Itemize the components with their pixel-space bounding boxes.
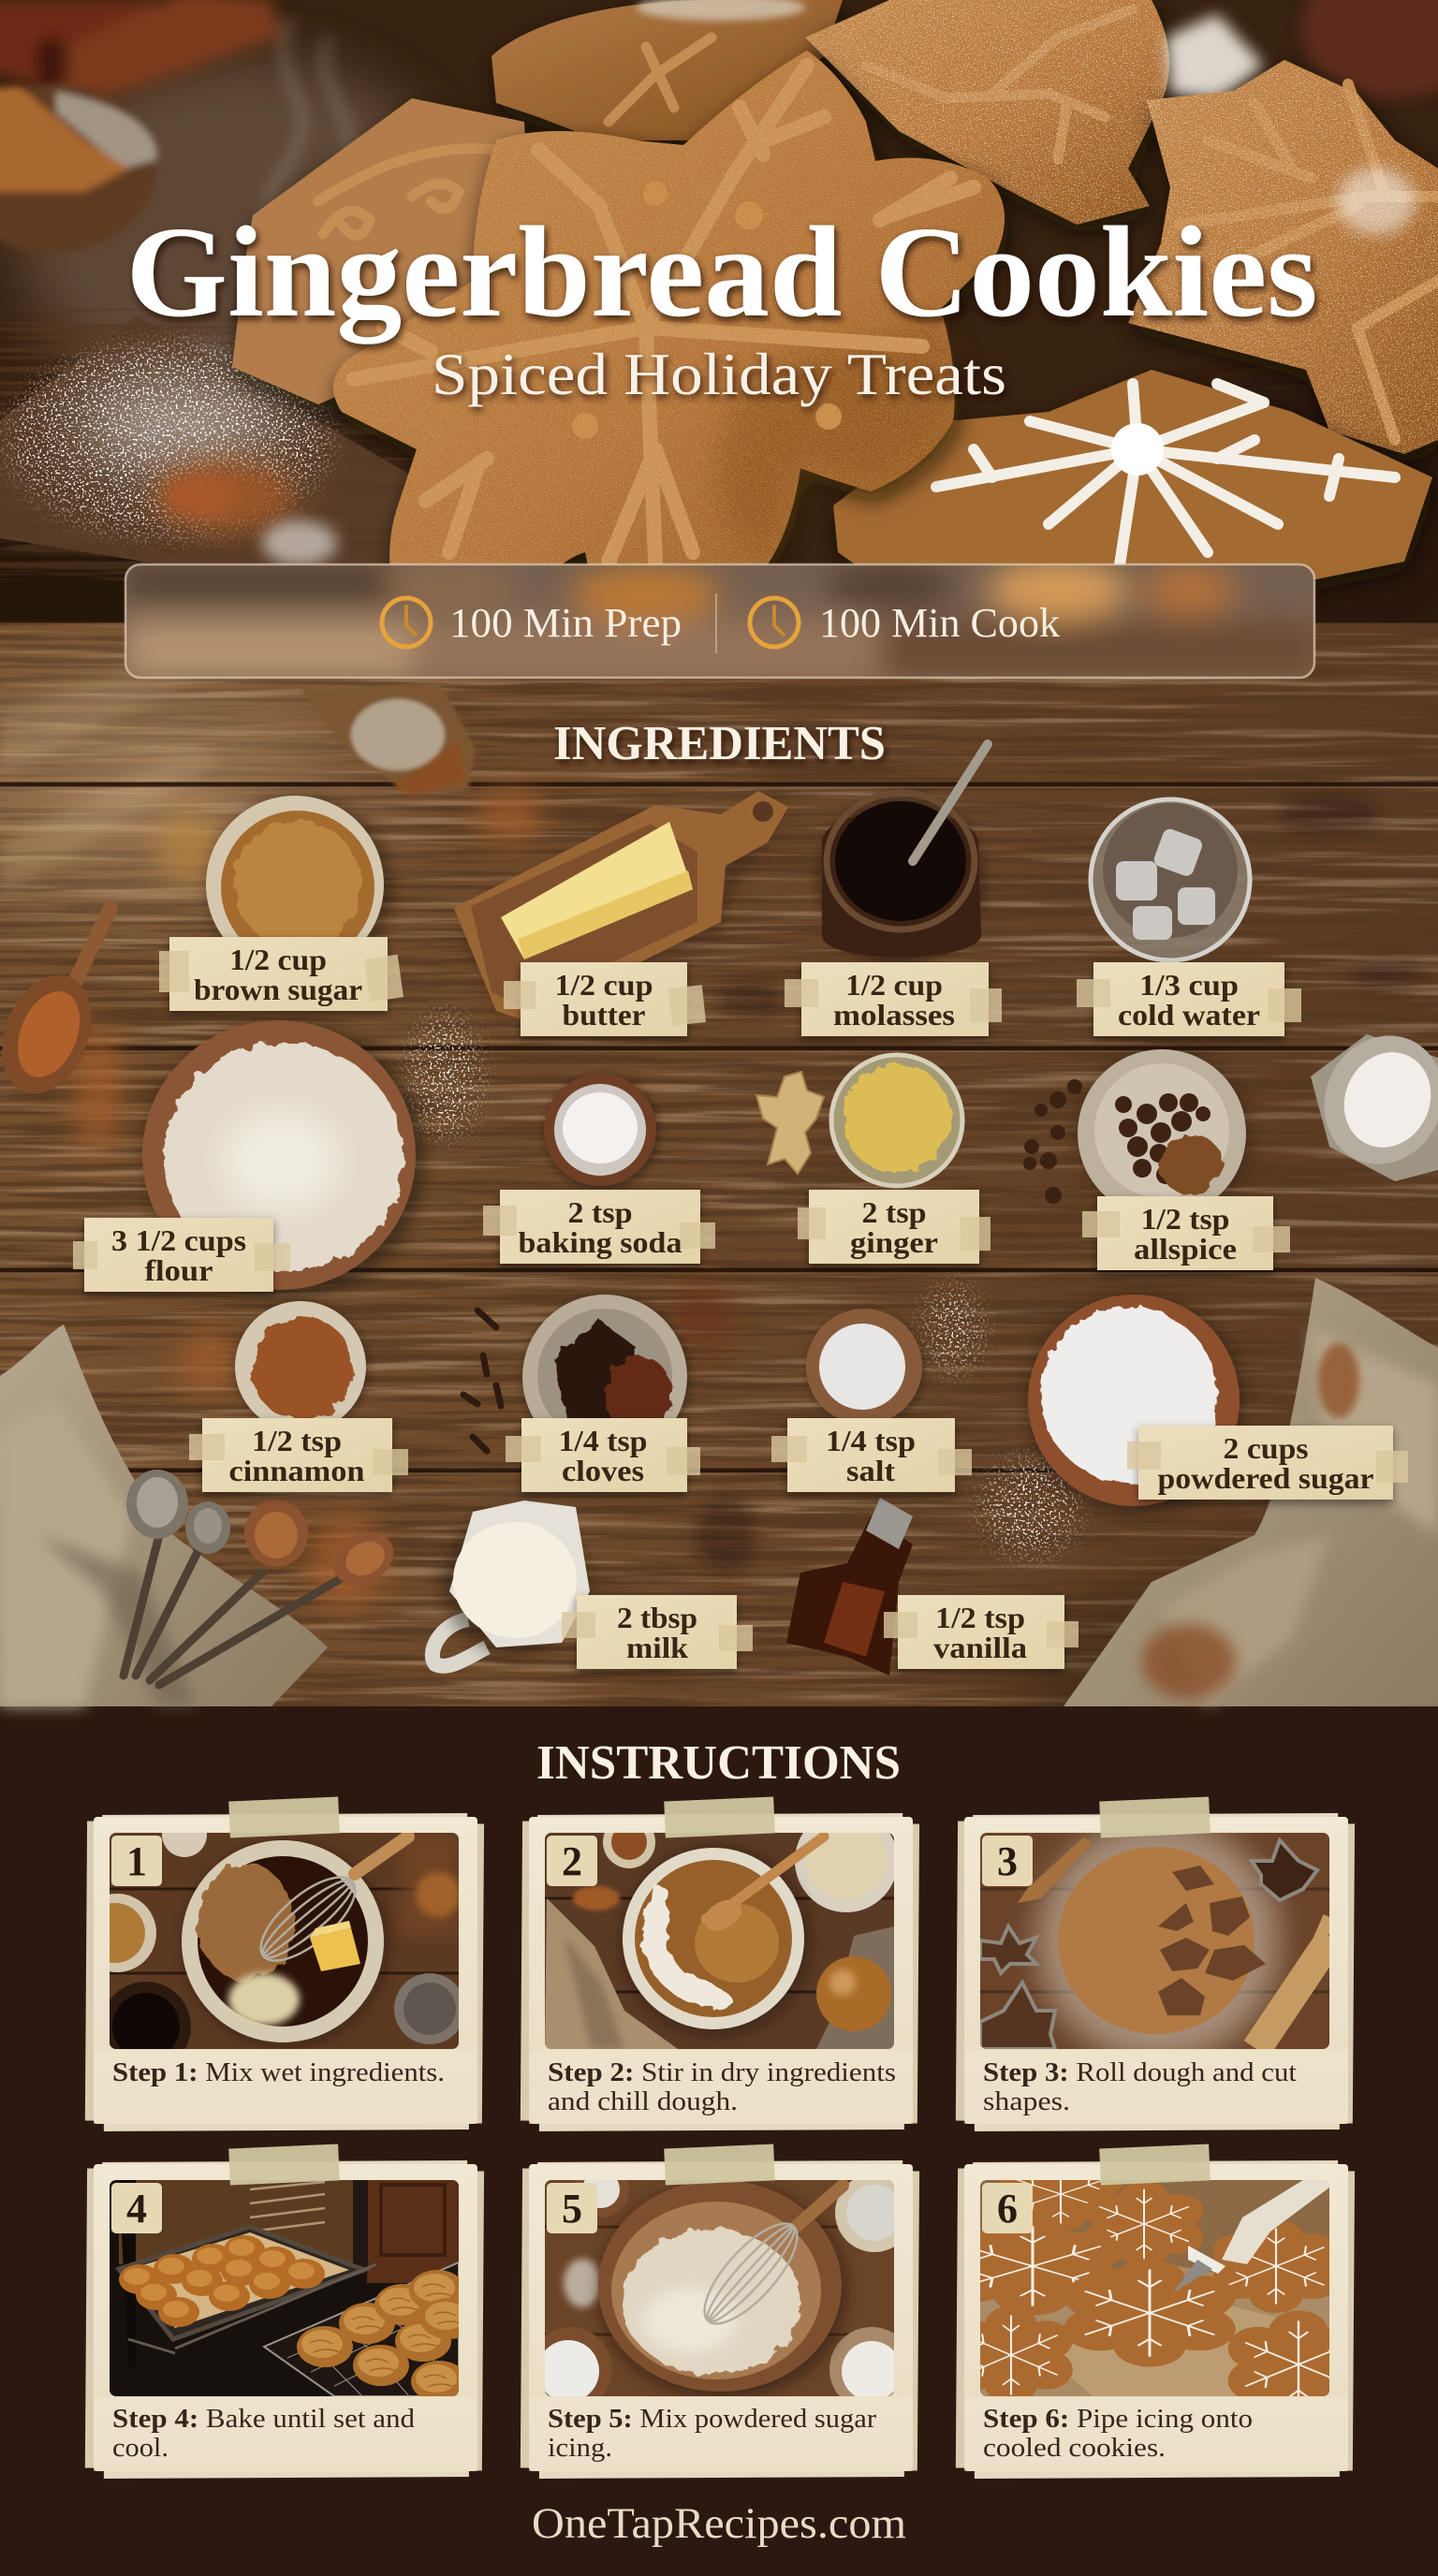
step 2 text <box>548 2057 896 2116</box>
label: brown sugar <box>159 937 404 1011</box>
image: piping icing <box>943 2157 1369 2419</box>
illustration: grated ginger jar <box>829 1053 964 1188</box>
label: milk <box>562 1595 753 1669</box>
label: ginger: 2 tsp <box>861 1195 927 1229</box>
label: cold water <box>1077 962 1301 1036</box>
step 4 text: cool. <box>112 2433 169 2463</box>
number badge 6 <box>982 2183 1033 2233</box>
illustration: scattered allspice berries <box>1023 1079 1082 1204</box>
step 6 text <box>983 2404 1253 2463</box>
illustration: measuring spoons <box>124 1470 403 1685</box>
label: molasses: molasses <box>833 998 955 1032</box>
label: ginger <box>798 1190 990 1264</box>
label: cold water: 1/3 cup <box>1139 968 1239 1002</box>
time bar <box>125 560 1320 678</box>
illustration: vanilla bottle <box>786 1498 913 1676</box>
illustration: brown sugar bowl <box>206 796 393 983</box>
card: step 4 <box>85 2144 484 2479</box>
illustration: baking soda bowl <box>544 1074 660 1191</box>
illustration: right linen towel <box>1064 1278 1438 1706</box>
section heading: ingredients: INGREDIENTS <box>553 717 886 770</box>
cinnamon bowl <box>0 84 157 253</box>
illustration: ginger root <box>756 1072 824 1174</box>
step 4 text: Step 4: Bake until set and <box>112 2404 416 2434</box>
number badge 5: 5 <box>562 2186 582 2232</box>
wood background: ingredients section <box>0 608 1438 1788</box>
wooden board <box>0 315 408 564</box>
image: mixing icing <box>528 2161 914 2411</box>
label: vanilla: vanilla <box>933 1631 1027 1664</box>
illustration: milk jug <box>433 1500 590 1666</box>
step 2 text: Step 2: Stir in dry ingredients <box>548 2057 896 2087</box>
label: flour <box>73 1218 290 1292</box>
label: brown sugar: brown sugar <box>194 973 362 1006</box>
cook time: 100 Min Cook <box>819 600 1060 646</box>
sugar and spice on board <box>80 379 276 473</box>
label: allspice: 1/2 tsp <box>1140 1202 1230 1236</box>
number badge 6: 6 <box>997 2186 1018 2232</box>
card: step 6 <box>943 2144 1369 2479</box>
image: baking in oven <box>110 2180 477 2402</box>
step 5 text: Step 5: Mix powdered sugar <box>548 2404 876 2434</box>
step 3 text: Step 3: Roll dough and cut <box>983 2057 1297 2087</box>
label: cinnamon: cinnamon <box>228 1454 365 1487</box>
label: cold water: cold water <box>1118 998 1260 1032</box>
label: brown sugar: 1/2 cup <box>229 943 327 976</box>
number badge 2 <box>547 1836 597 1886</box>
illustration: sugar jar <box>1303 1016 1438 1184</box>
label: powdered sugar <box>1127 1426 1408 1500</box>
image: stir dry ingredients <box>545 1809 898 2049</box>
label: baking soda: baking soda <box>519 1225 682 1259</box>
label: butter: butter <box>562 998 646 1032</box>
label: baking soda: 2 tsp <box>567 1195 633 1229</box>
label: milk: 2 tbsp <box>617 1601 697 1634</box>
label: cinnamon: 1/2 tsp <box>252 1424 342 1457</box>
number badge 5 <box>547 2183 597 2233</box>
icon: burlap scoop <box>300 683 476 796</box>
illustration: powdered sugar bowl <box>1026 1295 1245 1514</box>
illustration: wooden spoon with spice <box>0 908 110 1107</box>
prep time: 100 Min Prep <box>449 600 682 646</box>
illustration: flour bowl <box>142 1020 426 1299</box>
right snowflake cookie <box>1128 60 1438 454</box>
title: Gingerbread Cookies <box>125 200 1318 344</box>
footer: website: OneTapRecipes.com <box>532 2499 906 2548</box>
step 5 text <box>548 2404 876 2463</box>
icon: clock prep <box>382 598 431 647</box>
number badge 4: 4 <box>126 2186 147 2232</box>
subtitle: Spiced Holiday Treats <box>432 341 1006 407</box>
label: baking soda <box>483 1190 715 1264</box>
label: flour: 3 1/2 cups <box>111 1223 246 1257</box>
hero photo: gingerbread cookies <box>0 0 1438 601</box>
illustration: allspice bowl <box>1078 1049 1250 1222</box>
label: salt: 1/4 tsp <box>826 1424 916 1457</box>
label: powdered sugar: powdered sugar <box>1157 1461 1374 1495</box>
step 3 text: shapes. <box>983 2086 1070 2116</box>
illustration: scattered cloves <box>463 1310 501 1451</box>
label: cloves: 1/4 tsp <box>558 1424 648 1457</box>
step 1 text: Step 1: Mix wet ingredients. <box>112 2057 445 2087</box>
label: butter <box>504 962 706 1036</box>
illustration: cloves bowl <box>522 1295 691 1463</box>
step 6 text: Step 6: Pipe icing onto <box>983 2404 1253 2434</box>
spice dust patches <box>75 790 728 1610</box>
illustration: molasses jar <box>820 744 988 962</box>
back cookies <box>492 0 843 140</box>
steam <box>267 19 349 262</box>
label: salt: salt <box>846 1454 895 1487</box>
step 3 text <box>983 2057 1297 2116</box>
label: vanilla <box>884 1595 1078 1669</box>
main snowflake cookie <box>333 51 1005 621</box>
card: step 3 <box>956 1796 1355 2131</box>
image: mixing wet ingredients <box>78 1812 465 2071</box>
illustration: cinnamon bowl <box>235 1301 369 1436</box>
label: milk: milk <box>626 1631 688 1664</box>
illustration: butter on cutting board <box>454 791 788 1020</box>
number badge 1 <box>111 1836 162 1886</box>
number badge 2: 2 <box>562 1838 582 1884</box>
label: vanilla: 1/2 tsp <box>935 1601 1025 1634</box>
illustration: glass of cold water <box>1091 799 1250 960</box>
step 5 text: icing. <box>548 2433 612 2463</box>
number badge 4 <box>111 2183 162 2233</box>
section heading: instructions: INSTRUCTIONS <box>536 1736 901 1790</box>
label: butter: 1/2 cup <box>554 968 653 1002</box>
label: salt <box>771 1418 972 1492</box>
cinnamon sticks <box>0 0 281 98</box>
number badge 3 <box>982 1836 1033 1886</box>
card: step 2 <box>521 1796 919 2131</box>
step 4 text <box>112 2404 416 2463</box>
label: cinnamon <box>189 1418 408 1492</box>
illustration: left linen towel <box>0 1325 328 1706</box>
number badge 1: 1 <box>126 1838 147 1884</box>
label: ginger: ginger <box>850 1225 938 1259</box>
card: step 1 <box>78 1796 484 2131</box>
icing cookie <box>833 370 1432 621</box>
number badge 3: 3 <box>997 1838 1018 1884</box>
label: allspice <box>1082 1196 1290 1270</box>
card: step 5 <box>521 2144 919 2479</box>
icon: clock cook <box>750 598 799 647</box>
label: cloves: cloves <box>562 1454 644 1487</box>
label: allspice: allspice <box>1134 1232 1237 1266</box>
label: molasses: 1/2 cup <box>845 968 943 1002</box>
image: rolled dough and cutters <box>980 1819 1331 2062</box>
label: molasses <box>785 962 1002 1036</box>
label: powdered sugar: 2 cups <box>1223 1431 1309 1465</box>
label: flour: flour <box>144 1253 213 1287</box>
step 2 text: and chill dough. <box>548 2086 738 2116</box>
label: cloves <box>506 1418 700 1492</box>
step 6 text: cooled cookies. <box>983 2433 1166 2463</box>
illustration: salt bowl <box>806 1309 925 1428</box>
